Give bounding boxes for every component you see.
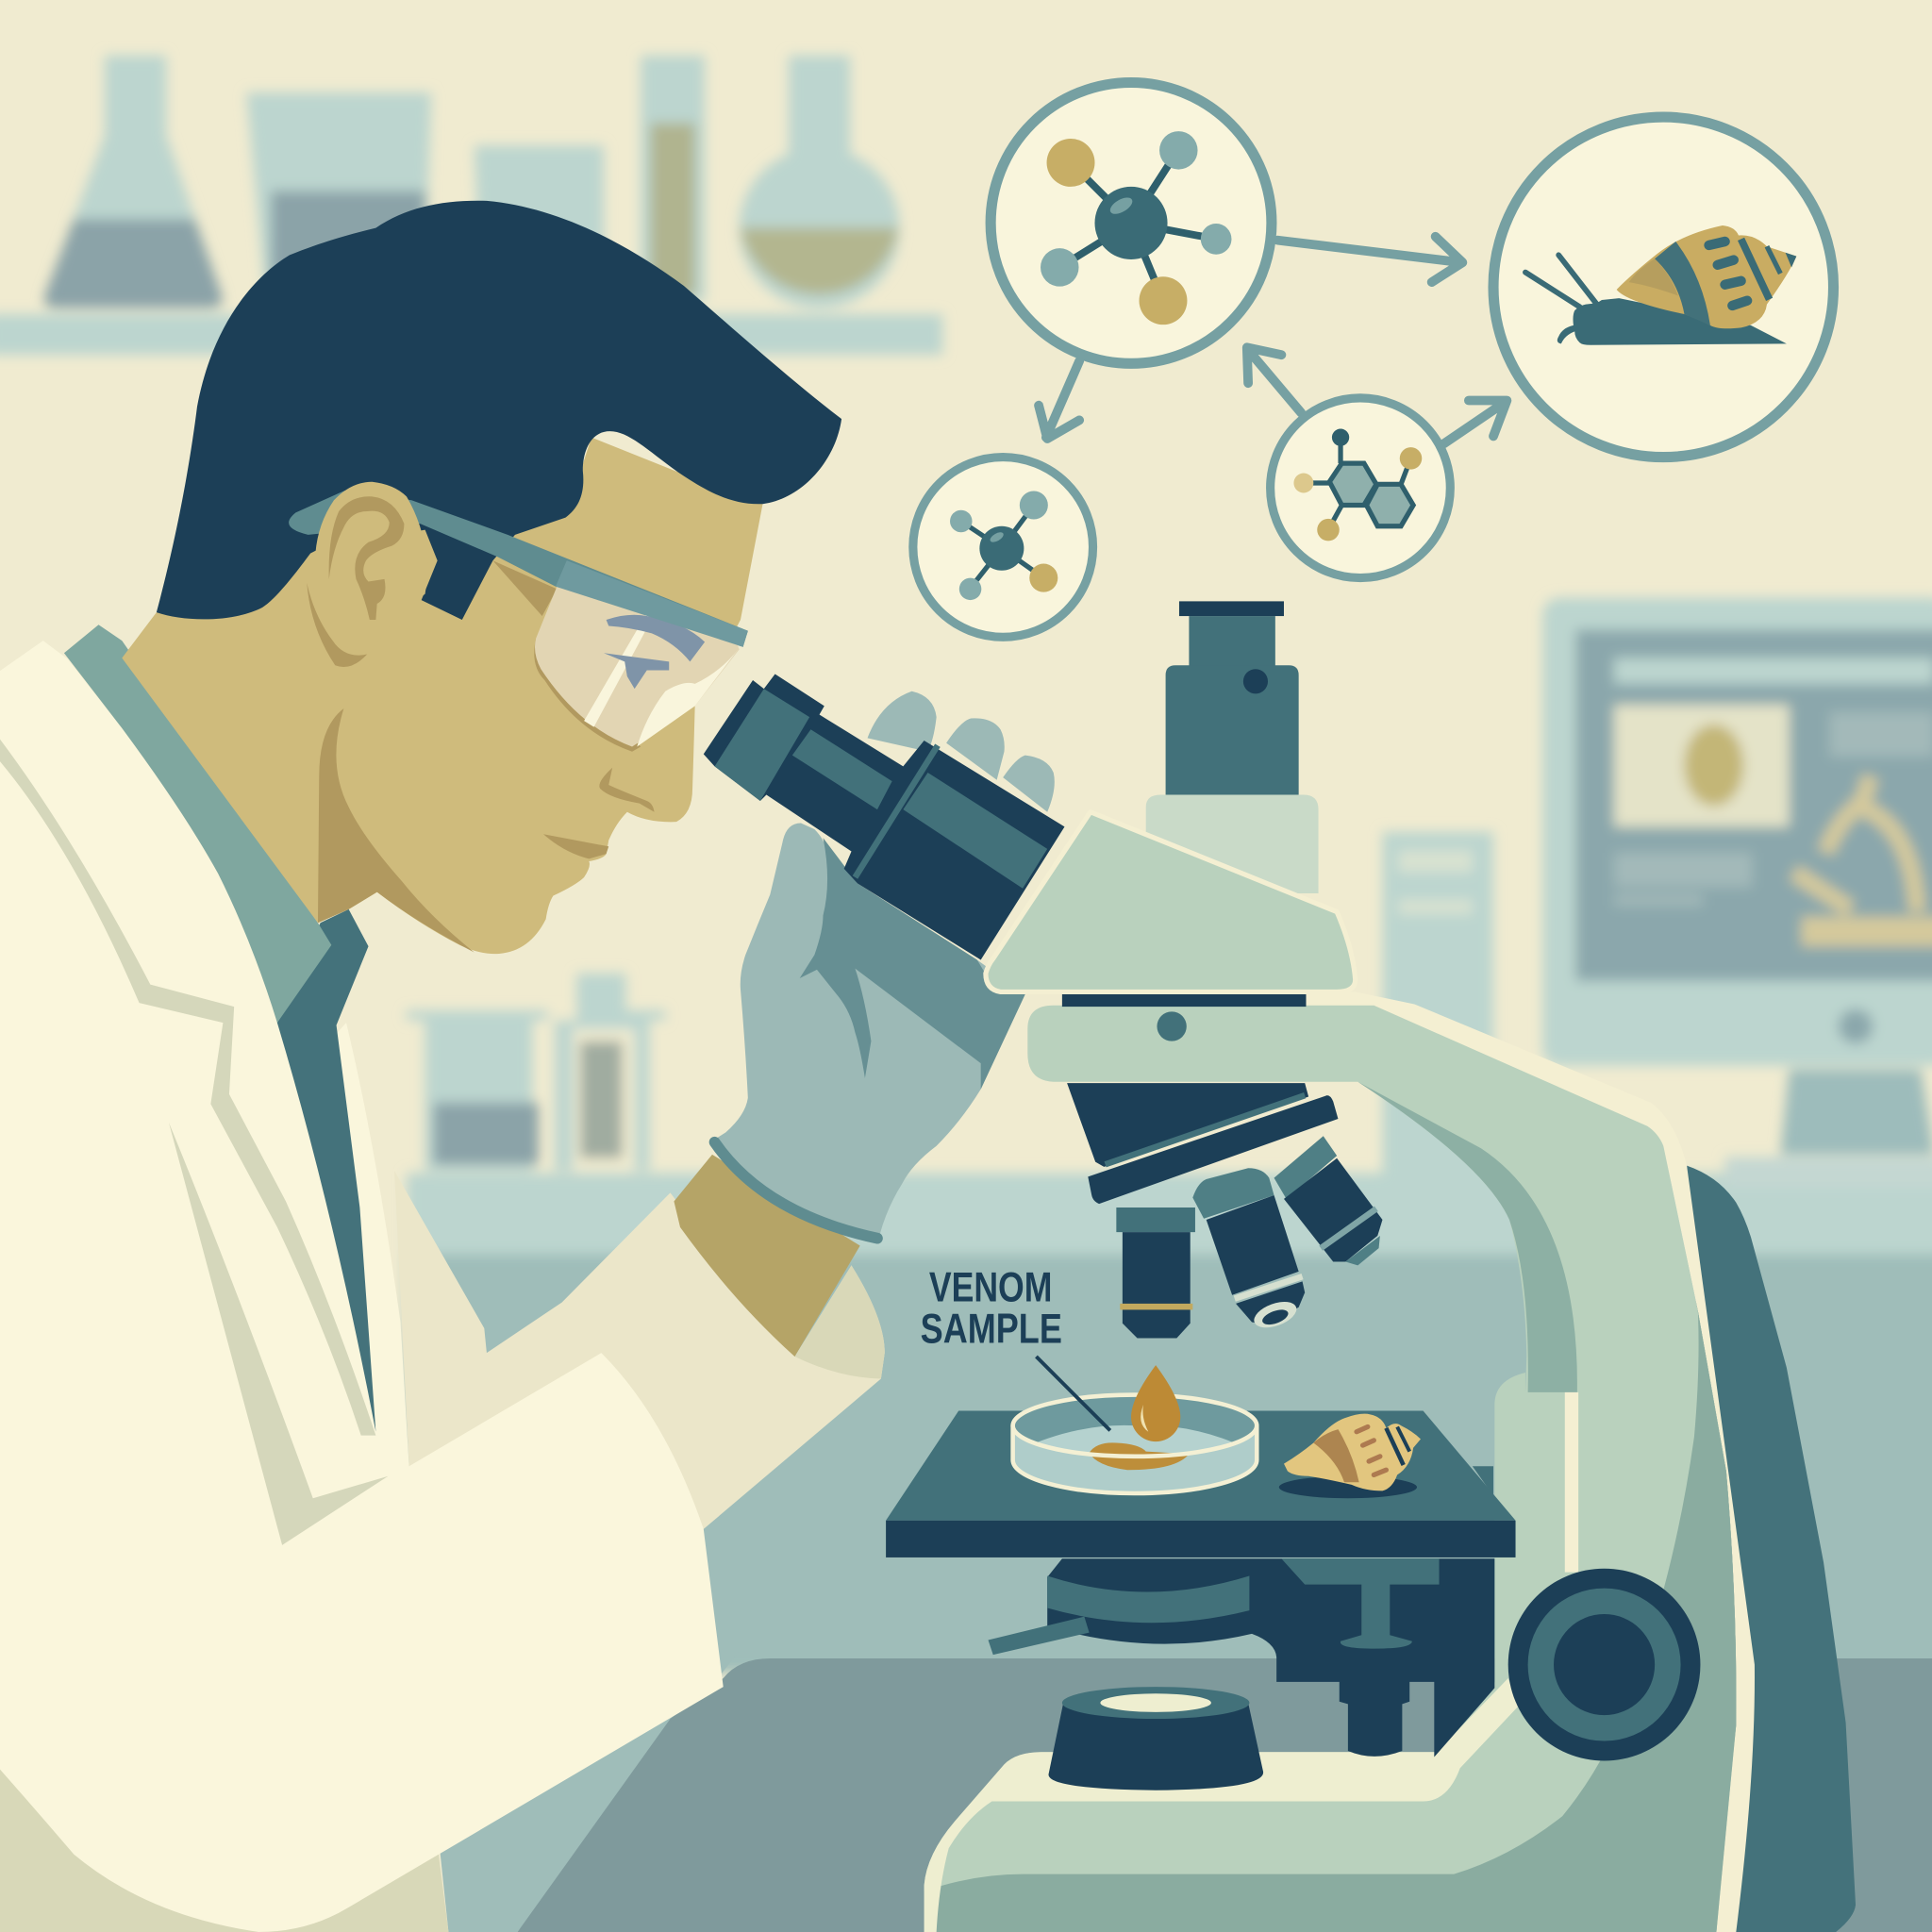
microscope column neck [1062,991,1306,1007]
shirt collar [64,625,331,1023]
petri dish with venom drop [1013,1365,1257,1493]
shade above lens [492,560,557,616]
lab coat rear sleeve [394,1171,885,1553]
neck shadow [318,708,475,953]
arm vertical highlight [1565,1392,1578,1573]
cream top edge of arm [1306,991,1755,1932]
lens shadow rim [534,639,641,752]
inner cuff shade [794,1265,885,1379]
lens reflection [584,608,738,747]
illuminator on base [1048,1687,1263,1790]
gloved hand [712,691,1055,1239]
base cream lip [924,1678,1518,1932]
blurred lab shelf with glassware [0,56,942,355]
molecule circle hexagon [1271,398,1450,578]
stage [886,1411,1516,1557]
microscope [886,601,1856,1932]
trinocular tube [1146,601,1319,893]
arm screw [1157,1011,1187,1041]
base sage shading [924,1311,1736,1932]
fingers behind tube [868,691,1055,812]
shirt and tie [277,909,375,1432]
wrist [674,1155,860,1357]
label: venom sample: SAMPLE [921,1307,1062,1353]
molecule circle large [991,83,1272,363]
snail shell on stage [1279,1414,1421,1498]
nosepiece turret [1067,1083,1338,1204]
hand shading [800,838,1025,1090]
microscope arm and base [924,1006,1736,1932]
blurred bench, glassware and monitor [407,597,1932,1674]
glove cuff [715,1142,877,1239]
glasses arm [289,491,748,647]
network arrows [1039,237,1507,443]
molecule circle small left [913,458,1093,637]
snail circle [1493,117,1834,458]
arm inner sage strip [1357,1082,1577,1392]
neck and face [122,438,762,954]
coat fold shadows [0,740,388,1545]
stage support and focus block [989,1558,1494,1757]
microscope head [986,812,1356,991]
safety glasses lens [535,587,740,747]
lab coat body [0,641,724,1932]
hair [157,201,841,620]
glasses front band [556,560,748,647]
objective lenses [1116,1136,1382,1338]
microscope rear arm strip [1687,1166,1856,1932]
coat bottom shade [0,1770,448,1932]
bench front visible below the coat [419,1651,740,1932]
label: venom sample: VENOM [929,1264,1052,1310]
focus knob [1508,1569,1700,1760]
nose and mouth details [543,768,655,858]
ear [307,482,427,667]
label leader line [1036,1357,1110,1430]
eye details [604,615,705,689]
scientist [0,201,885,1932]
lapel beside the shirt [335,1023,409,1466]
lab table [518,1658,1932,1932]
binocular eyepiece [704,674,1064,959]
palm and thumb [712,823,1025,1235]
